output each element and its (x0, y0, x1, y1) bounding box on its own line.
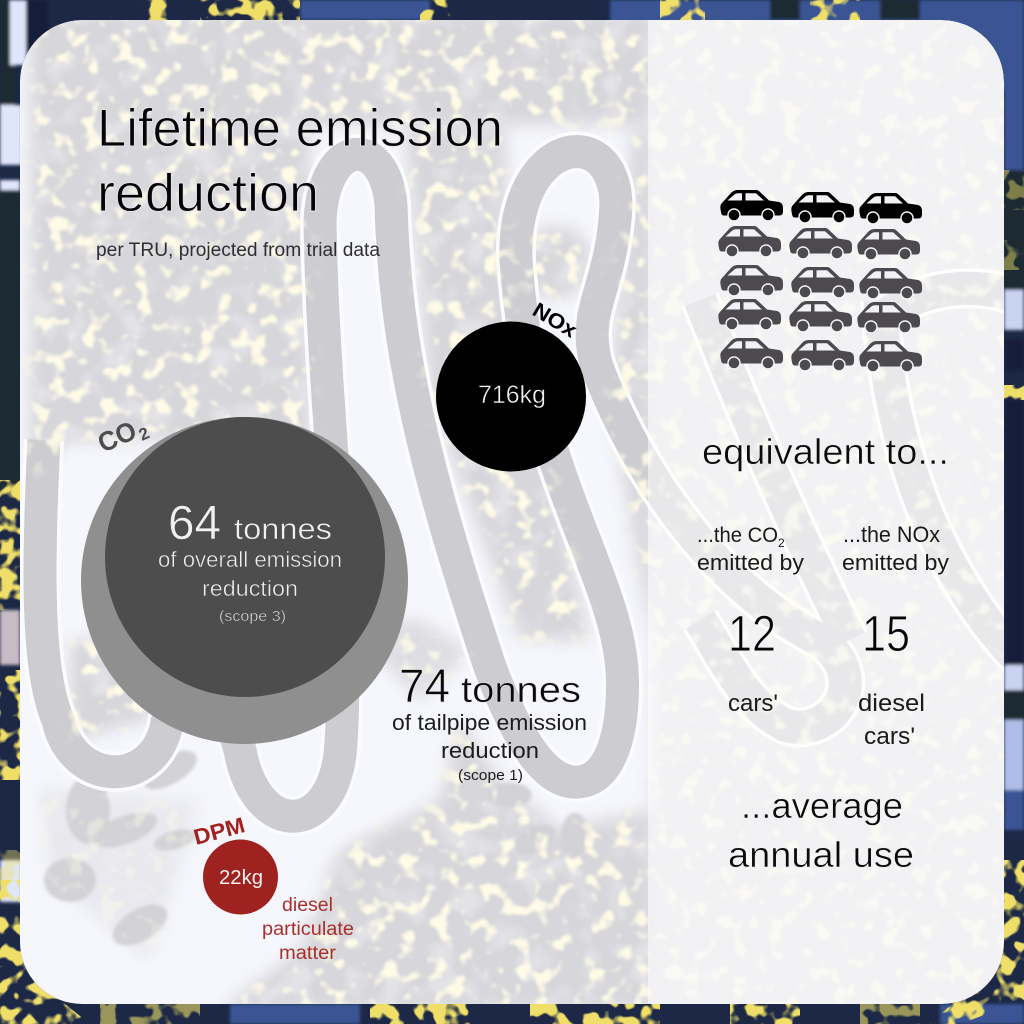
bubble: NOx: 716kg (478, 381, 546, 409)
closing text: average annual use (728, 785, 914, 875)
title (97, 99, 503, 223)
callout: 74 tonnes tailpipe: tonnes (461, 669, 581, 710)
column: CO2 equivalent: ...the CO (697, 524, 778, 547)
icon grid: cars (718, 190, 922, 372)
label: diesel particulate matter: matter (279, 943, 337, 964)
callout: 74 tonnes tailpipe: reduction (441, 738, 539, 763)
title: reduction (97, 164, 319, 223)
bubble: DPM (191, 812, 278, 914)
label: diesel particulate matter: particulate (262, 919, 354, 940)
column: CO2 equivalent: 12 (728, 605, 776, 662)
bubble: DPM: 22kg (219, 867, 263, 889)
bubble: CO2 overall inner circle: reduction (202, 576, 298, 601)
bubble: DPM: DPM (191, 812, 248, 850)
bubble: CO2 overall inner circle: tonnes (234, 513, 332, 546)
closing text: average annual use: annual use (728, 834, 914, 875)
bubble: NOx: NOx (528, 299, 581, 343)
bubble: CO2 overall inner circle (105, 417, 385, 697)
title: Lifetime emission (97, 99, 503, 158)
bubble: CO2 overall inner circle: 64 (168, 497, 221, 550)
panel: left translucent overlay (20, 20, 648, 1004)
callout: 74 tonnes tailpipe: 74 (399, 659, 450, 712)
column: NOx equivalent (842, 522, 949, 750)
column: CO2 equivalent: emitted by (697, 550, 804, 575)
bubble: CO2 overall inner circle: (scope 3) (219, 608, 286, 625)
label: CO2: CO (93, 415, 141, 458)
column: NOx equivalent: diesel (858, 690, 925, 717)
callout: 74 tonnes tailpipe: of tailpipe emission (392, 710, 587, 735)
label: CO2: 2 (136, 423, 152, 445)
column: NOx equivalent: ...the NOx (843, 522, 940, 547)
label: diesel particulate matter (262, 895, 354, 964)
bubble: CO2 overall inner circle: of overall emission (158, 547, 342, 572)
panel: right translucent overlay (648, 20, 1004, 1004)
road (40, 152, 1024, 816)
subtitle: per TRU, projected from trial data (96, 240, 380, 261)
column: CO2 equivalent (697, 524, 804, 717)
column: NOx equivalent: emitted by (842, 550, 949, 575)
heading: equivalent to: equivalent to... (702, 431, 949, 472)
bubble: CO2 tailpipe outer circle (81, 417, 408, 744)
bubble: NOx (436, 299, 586, 472)
label: diesel particulate matter: diesel (282, 895, 333, 916)
closing text: average annual use: ...average (741, 785, 903, 826)
column: CO2 equivalent: 2 (778, 536, 785, 550)
callout: 74 tonnes tailpipe: (scope 1) (458, 767, 523, 784)
column: NOx equivalent: 15 (862, 605, 910, 662)
callout: 74 tonnes tailpipe (392, 659, 587, 784)
column: CO2 equivalent: cars' (728, 690, 778, 717)
column: NOx equivalent: cars' (864, 723, 915, 750)
